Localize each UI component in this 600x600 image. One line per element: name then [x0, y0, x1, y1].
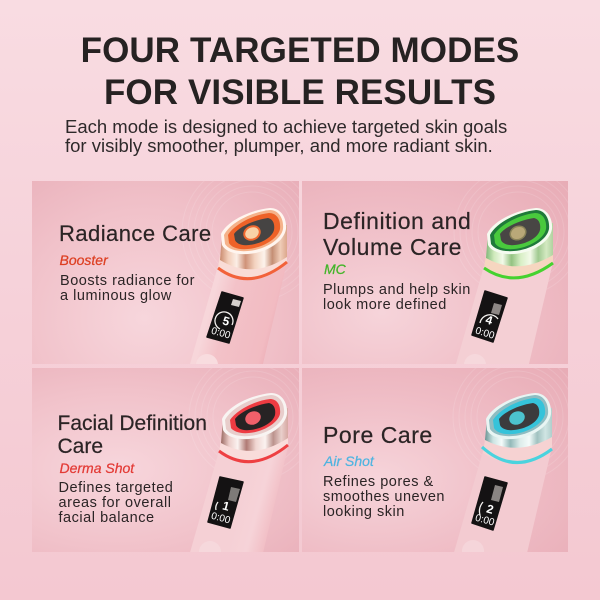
heading: Definition and — [323, 208, 471, 234]
heading: Care — [58, 435, 103, 458]
heading — [58, 412, 207, 458]
screen: 0:00 — [474, 326, 496, 342]
description: looking skin — [323, 504, 405, 520]
screen — [472, 477, 507, 530]
mode name: MC — [324, 261, 346, 277]
mode name: Derma Shot — [60, 460, 134, 476]
heading: Pore Care — [323, 422, 433, 448]
description — [323, 282, 471, 312]
screen: 1 — [221, 499, 231, 514]
screen: 0:00 — [210, 511, 232, 527]
heading: Volume Care — [323, 234, 462, 260]
device: Derma Shot — [185, 353, 317, 570]
subtitle — [65, 116, 507, 156]
description: smoothes uneven — [323, 488, 445, 504]
description: Refines pores & — [323, 474, 434, 490]
screen: 0:00 — [474, 513, 496, 529]
power button — [462, 540, 484, 562]
screen — [208, 477, 243, 528]
panel: Radiance Care — [32, 181, 299, 364]
head face — [486, 393, 551, 439]
heading — [323, 208, 471, 260]
description: facial balance — [58, 510, 155, 526]
device: Booster — [182, 162, 322, 385]
heading: Radiance Care — [59, 220, 212, 246]
description — [323, 474, 445, 520]
head face — [221, 208, 286, 254]
description — [58, 480, 173, 526]
heading: Facial Definition — [58, 412, 207, 435]
panel: Pore Care — [302, 368, 568, 552]
screen: 4 — [484, 313, 495, 328]
description: a luminous glow — [60, 288, 172, 304]
title: FOUR TARGETED MODES — [81, 31, 519, 70]
panel: Definition and Volume Care — [302, 181, 568, 364]
screen: 5 — [221, 314, 232, 329]
mode name: Air Shot — [324, 453, 374, 469]
device: Air Shot — [449, 353, 581, 570]
power button — [464, 354, 486, 376]
panel: Facial Definition Care — [32, 368, 299, 552]
screen — [207, 292, 243, 343]
device: MC — [450, 168, 582, 385]
power button — [199, 541, 221, 563]
screen: 2 — [485, 502, 496, 517]
screen — [472, 291, 507, 342]
power button — [196, 354, 218, 376]
subtitle: Each mode is designed to achieve targeted skin goals — [65, 116, 507, 137]
subtitle: for visibly smoother, plumper, and more radiant skin. — [65, 134, 493, 156]
screen: 0:00 — [210, 326, 232, 342]
description: Plumps and help skin — [323, 282, 471, 298]
mode name: Booster — [60, 252, 108, 268]
head face — [222, 393, 287, 439]
title — [81, 31, 519, 112]
title: FOR VISIBLE RESULTS — [104, 73, 496, 112]
description: Defines targeted — [58, 480, 173, 496]
head face — [487, 208, 552, 254]
description: Boosts radiance for — [60, 272, 195, 288]
description — [60, 272, 195, 304]
description: look more defined — [323, 296, 447, 312]
description: areas for overall — [58, 494, 171, 510]
